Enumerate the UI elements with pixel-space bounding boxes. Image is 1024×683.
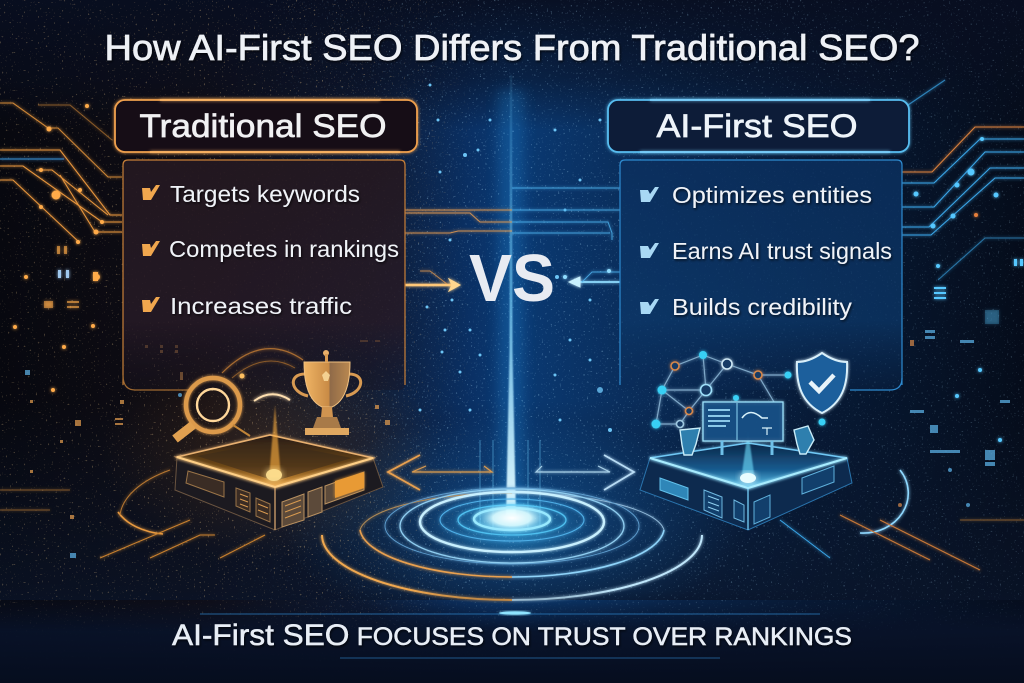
item: Builds credibility: Builds credibility (672, 294, 853, 320)
icon: trophy (293, 350, 361, 435)
circuit traces: left (0, 103, 122, 392)
icon: right hand (794, 426, 814, 454)
central light core (470, 501, 554, 535)
icon: shield with check (797, 353, 847, 413)
heading box: Traditional SEO: Traditional SEO (140, 108, 386, 144)
bottom takeaway: AI-First SEO FOCUSES ON TRUST OVER RANKINGS (172, 619, 852, 652)
VS label: VS (469, 241, 555, 316)
heading box: AI-First SEO (608, 100, 909, 152)
icon: left hand (680, 428, 700, 455)
circuit traces: right (902, 80, 1024, 442)
panel: AI-First SEO list (620, 160, 902, 390)
title: How AI-First SEO Differs From Traditional SEO? (104, 27, 920, 68)
icon: arcs between magnifier and trophy (222, 349, 303, 401)
item: Targets keywords: Targets keywords (170, 181, 360, 207)
platform: AI-first (640, 443, 852, 530)
item: Optimizes entities: Optimizes entities (672, 182, 872, 208)
platform: traditional (175, 435, 383, 530)
item: Increases traffic: Increases traffic (170, 293, 352, 319)
heading box: AI-First SEO: AI-First SEO (656, 108, 858, 144)
panel: Traditional SEO list (123, 150, 405, 390)
checklist: AI-First SEO (640, 182, 892, 320)
bottom banner band (0, 590, 1024, 683)
light beam: AI-first (740, 430, 756, 483)
item: Earns AI trust signals: Earns AI trust signals (672, 238, 892, 264)
concentric rings with central glow (322, 488, 702, 600)
connector lines and arrow: AI-First to VS (512, 188, 620, 287)
connector lines and arrow: Traditional to VS (405, 210, 512, 291)
item: Competes in rankings: Competes in rankings (169, 236, 399, 262)
light beam: traditional (244, 405, 305, 481)
center beam (480, 75, 540, 530)
icon: network graph (652, 351, 826, 428)
checklist: Traditional SEO (142, 181, 399, 319)
icon: magnifying glass (175, 378, 250, 439)
ground chevrons and orbit arcs (0, 455, 1024, 570)
heading box: Traditional SEO (115, 100, 417, 152)
icon: monitor with dashboard (703, 402, 783, 455)
